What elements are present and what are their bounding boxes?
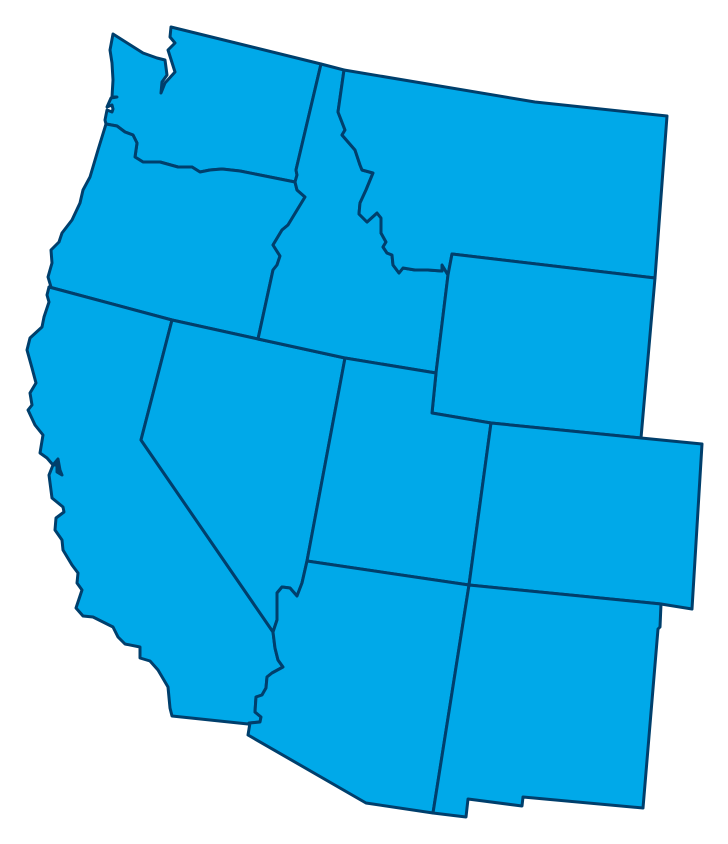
state: Montana bbox=[338, 70, 667, 278]
state: Colorado bbox=[469, 423, 702, 609]
state: Washington bbox=[105, 27, 321, 182]
state: Arizona bbox=[248, 561, 469, 813]
feature: San Francisco Bay bbox=[53, 459, 62, 475]
state: Nevada bbox=[141, 320, 345, 632]
state: New Mexico bbox=[433, 585, 661, 817]
state: Idaho bbox=[258, 64, 448, 373]
state: California bbox=[27, 287, 283, 724]
state: Utah bbox=[307, 358, 491, 585]
state: Wyoming bbox=[432, 254, 655, 438]
state: Oregon bbox=[48, 124, 305, 339]
